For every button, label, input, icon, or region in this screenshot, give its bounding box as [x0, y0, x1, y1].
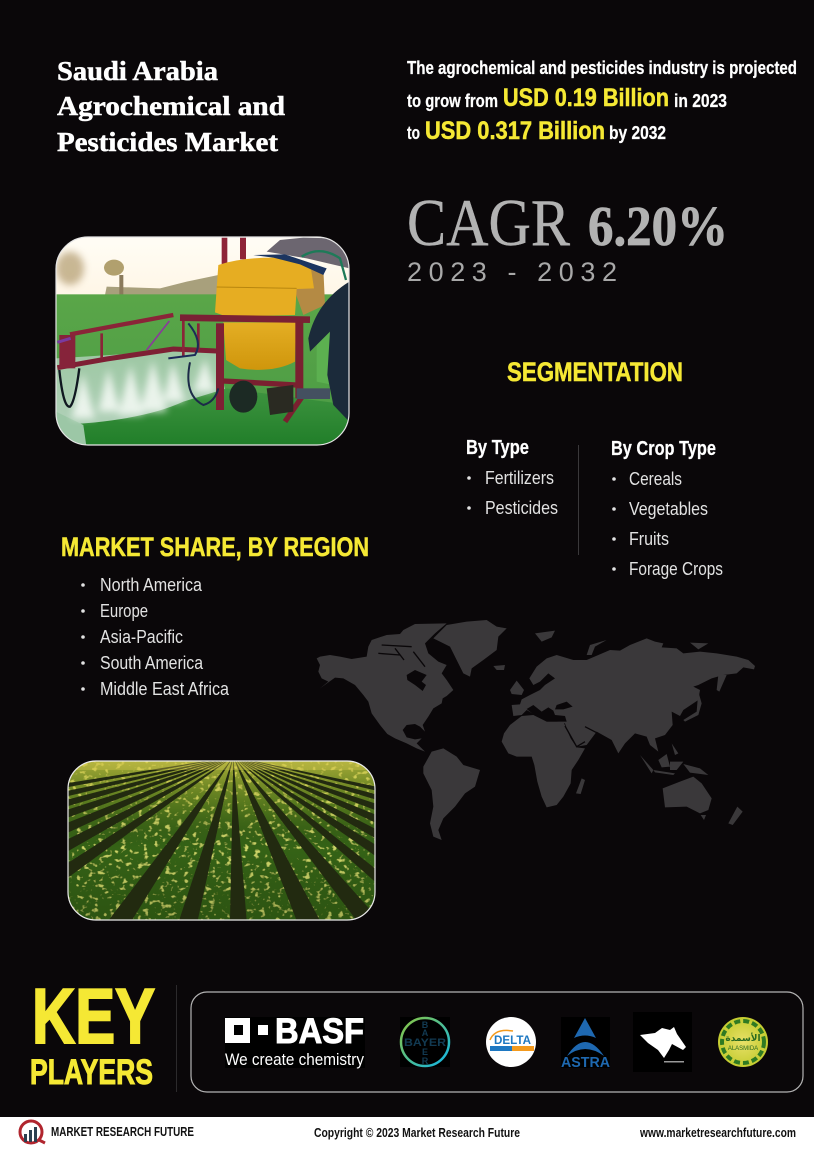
logo: Delta: DELTA [494, 1033, 531, 1047]
key players heading [30, 972, 155, 1092]
region list: Asia-Pacific [100, 627, 183, 647]
CAGR figure: CAGR [407, 186, 570, 260]
segmentation: by crop type: Fruits [629, 529, 669, 549]
logo: Bayer [400, 1017, 450, 1067]
segmentation heading: SEGMENTATION [507, 357, 683, 387]
segmentation: by crop type: Vegetables [629, 499, 708, 519]
logo: BASF [225, 1012, 365, 1069]
logo: Astra: ASTRA [561, 1054, 610, 1071]
footer bar: Copyright © 2023 Market Research Future [314, 1126, 520, 1140]
africa [502, 715, 585, 807]
segmentation: by crop type: Cereals [629, 469, 682, 489]
projection text block: by 2032 [609, 123, 666, 143]
key players panel [191, 992, 803, 1092]
world map [317, 620, 755, 840]
region list [81, 575, 230, 699]
projection text block: in 2023 [674, 91, 727, 111]
CAGR figure: 6.20% [588, 196, 728, 258]
logo: Alasmida: الأسمدة [725, 1032, 761, 1044]
northern islands [493, 631, 727, 695]
mist jets [72, 358, 215, 418]
footer logo [20, 1121, 45, 1143]
projection text block: to [407, 123, 420, 143]
market share heading: MARKET SHARE, BY REGION [61, 532, 369, 562]
logo: Delta [486, 1017, 536, 1067]
eurasia [512, 638, 755, 753]
projection text block: USD 0.317 Billion [425, 117, 605, 145]
segmentation: by type [466, 437, 558, 518]
logo: Horse [633, 1012, 692, 1072]
segmentation: by crop type: Forage Crops [629, 559, 723, 579]
segmentation: by crop type [611, 438, 723, 579]
segmentation: by crop type: By Crop Type [611, 438, 716, 460]
CAGR figure [407, 186, 728, 287]
photo: crop field rows [68, 757, 380, 921]
region list: North America [100, 575, 203, 595]
logo: Astra [561, 1017, 610, 1071]
logo: Alasmida [718, 1017, 768, 1067]
logo: Bayer: R [422, 1056, 429, 1066]
photo: crop sprayer [56, 235, 350, 448]
segmentation: by type: By Type [466, 437, 529, 459]
segmentation: by type: Fertilizers [485, 468, 554, 488]
footer bar: MARKET RESEARCH FUTURE [51, 1125, 194, 1139]
projection text block: USD 0.19 Billion [503, 84, 669, 112]
inland seas and bays [407, 670, 573, 722]
title [57, 56, 285, 157]
logo: BASF: BASF [275, 1012, 364, 1051]
logo: Bayer: BAYER [404, 1037, 446, 1049]
southeast asian islands [640, 743, 708, 775]
title: Saudi Arabia [57, 56, 219, 86]
region list: Middle East Africa [100, 679, 230, 699]
footer bar [0, 1117, 814, 1150]
projection text block [407, 58, 797, 145]
south america [423, 748, 480, 840]
logo: Bayer: A [422, 1028, 429, 1038]
logo: Alasmida: ALASMIDA [728, 1046, 758, 1052]
key players heading: KEY [32, 972, 155, 1060]
north america [317, 623, 453, 752]
title: Pesticides Market [57, 127, 278, 157]
japan, madagascar, new zealand, tasmania [576, 692, 743, 825]
region list: South America [100, 653, 204, 673]
title: Agrochemical and [57, 91, 285, 121]
key players heading: PLAYERS [30, 1053, 153, 1092]
projection text block: to grow from [407, 91, 498, 111]
segmentation: by type: Pesticides [485, 498, 558, 518]
logo: BASF: We create chemistry [225, 1051, 365, 1069]
greenland [433, 620, 507, 677]
region list: Europe [100, 601, 148, 621]
logo: Bayer: E [422, 1047, 428, 1057]
CAGR figure: 2023 - 2032 [407, 257, 617, 287]
logo: Bayer: B [422, 1020, 429, 1030]
australia [663, 777, 712, 813]
